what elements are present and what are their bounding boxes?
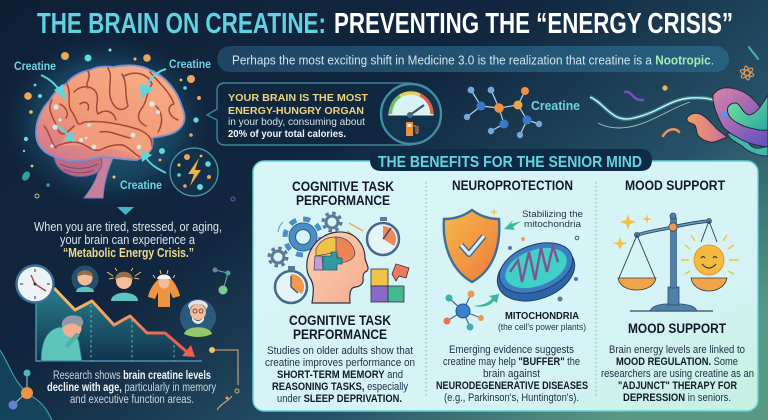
callout: energy-hungry organ: ENERGY-HUNGRY ORGAN bbox=[228, 105, 364, 117]
text: research on creatine decline: Research shows brain creatine levels bbox=[53, 370, 211, 382]
brain folds bbox=[44, 68, 178, 157]
icon: head with puzzle brain bbox=[307, 232, 368, 303]
section header bbox=[370, 149, 652, 171]
creatine labels bbox=[14, 57, 211, 192]
column: cognitive task performance bbox=[265, 179, 415, 405]
creatine arrows bbox=[41, 69, 166, 173]
body text bbox=[265, 345, 415, 405]
temporal lobe band bbox=[58, 121, 152, 158]
molecule label: Creatine bbox=[531, 98, 580, 113]
energy circle icon bbox=[170, 148, 218, 196]
body text: under SLEEP DEPRIVATION. bbox=[277, 393, 402, 405]
creatine labels: Creatine bbox=[169, 57, 211, 71]
icon: stopwatch left bbox=[275, 266, 307, 303]
decorative corner curves and molecules bbox=[0, 268, 239, 420]
body text: REASONING TASKS, especially bbox=[272, 381, 408, 393]
annotation: stabilizing the mitochondria: mitochondria bbox=[524, 219, 582, 230]
card subheading: COGNITIVE TASK bbox=[289, 313, 391, 328]
icon: elderly man bbox=[180, 299, 216, 337]
icon: shield bbox=[444, 209, 499, 282]
section header: THE BENEFITS FOR THE SENIOR MIND bbox=[378, 154, 642, 171]
body text: "ADJUNCT" THERAPY FOR bbox=[618, 380, 737, 392]
text: metabolic energy crisis: “Metabolic Energy Crisis.” bbox=[63, 246, 194, 260]
decorative wave and blobs bbox=[590, 47, 768, 156]
body text: brain against bbox=[483, 368, 540, 380]
brain lobes bbox=[36, 65, 185, 161]
mitochondria label: MITOCHONDRIA bbox=[505, 310, 579, 322]
icon: tired face bbox=[72, 266, 98, 292]
pointer triangle bbox=[117, 207, 134, 215]
column heading: PERFORMANCE bbox=[296, 193, 390, 208]
icon: gears bbox=[269, 213, 363, 266]
icon: mitochondrion bbox=[490, 233, 582, 311]
body text: Emerging evidence suggests bbox=[449, 344, 574, 356]
icon: fuel gauge bbox=[381, 84, 441, 144]
creatine sparkles bbox=[50, 101, 160, 149]
body text: MOOD REGULATION. Some bbox=[616, 356, 738, 368]
text: research on creatine decline bbox=[47, 370, 216, 406]
body text bbox=[601, 344, 754, 404]
title bbox=[37, 8, 733, 40]
mitochondria label: (the cell's power plants) bbox=[498, 322, 586, 333]
callout: energy-hungry organ: YOUR BRAIN IS THE MOST bbox=[228, 92, 369, 104]
body text: Studies on older adults show that bbox=[267, 345, 413, 357]
icon: molecule with arrow bbox=[444, 290, 499, 330]
body text: (e.g., Parkinson's, Huntington's). bbox=[444, 392, 579, 404]
creatine labels: Creatine bbox=[14, 59, 56, 73]
body text: NEURODEGENERATIVE DISEASES bbox=[436, 380, 588, 392]
card subheading: PERFORMANCE bbox=[293, 327, 387, 342]
brain illustration bbox=[0, 30, 235, 214]
text: metabolic energy crisis: your brain can experience a bbox=[60, 233, 195, 247]
column heading: MOOD SUPPORT bbox=[625, 178, 726, 193]
column heading bbox=[292, 179, 394, 208]
body text: SHORT-TERM MEMORY and bbox=[277, 369, 403, 381]
mitochondria label bbox=[498, 310, 586, 333]
creatine molecule bbox=[464, 87, 580, 138]
callout: energy-hungry organ: 20% of your total calories. bbox=[228, 128, 346, 140]
callout: energy-hungry organ: in your body, consuming about bbox=[228, 116, 365, 128]
text: research on creatine decline: decline with age, particularly in memory bbox=[47, 382, 216, 394]
title: THE BRAIN ON CREATINE: bbox=[37, 8, 326, 40]
icon: clock bbox=[16, 266, 54, 302]
text: research on creatine decline: and executive function areas. bbox=[70, 394, 194, 406]
card subheading: MOOD SUPPORT bbox=[628, 321, 727, 336]
subtitle banner bbox=[217, 46, 729, 72]
body text: Brain energy levels are linked to bbox=[609, 344, 745, 356]
icon: stopwatch right bbox=[367, 217, 399, 255]
body text: creatine may help "BUFFER" the bbox=[443, 356, 580, 368]
icon: jigsaw pieces bbox=[371, 264, 409, 302]
column: neuroprotection bbox=[436, 178, 588, 404]
text: metabolic energy crisis bbox=[34, 220, 222, 260]
body text: creatine improves performance on bbox=[265, 357, 415, 369]
card subheading bbox=[289, 313, 391, 342]
chart: energy decline with age bbox=[16, 266, 216, 361]
cerebellum and brainstem bbox=[84, 156, 113, 198]
annotation: stabilizing the mitochondria bbox=[504, 209, 583, 230]
body text: DEPRESSION in seniors. bbox=[623, 392, 731, 404]
icon: headache person bbox=[148, 270, 180, 307]
subtitle banner: Perhaps the most exciting shift in Medicine 3.0 is the realization that creatine is a Nootropic. bbox=[232, 52, 714, 68]
icon: balance scale with smile bbox=[613, 213, 739, 311]
figure: bowed head person bbox=[41, 315, 83, 361]
text: metabolic energy crisis: When you are tired, stressed, or aging, bbox=[34, 220, 222, 234]
energy particles bbox=[20, 48, 235, 201]
creatine labels: Creatine bbox=[120, 178, 162, 192]
panel: benefits for the senior mind bbox=[253, 149, 758, 411]
body text bbox=[436, 344, 588, 404]
callout: energy-hungry organ bbox=[207, 83, 411, 145]
column: mood support bbox=[601, 178, 754, 404]
column heading: NEUROPROTECTION bbox=[452, 178, 573, 193]
icon: stressed person bbox=[107, 268, 141, 301]
annotation: stabilizing the mitochondria: Stabilizing the bbox=[522, 209, 583, 220]
column heading: COGNITIVE TASK bbox=[292, 179, 394, 194]
